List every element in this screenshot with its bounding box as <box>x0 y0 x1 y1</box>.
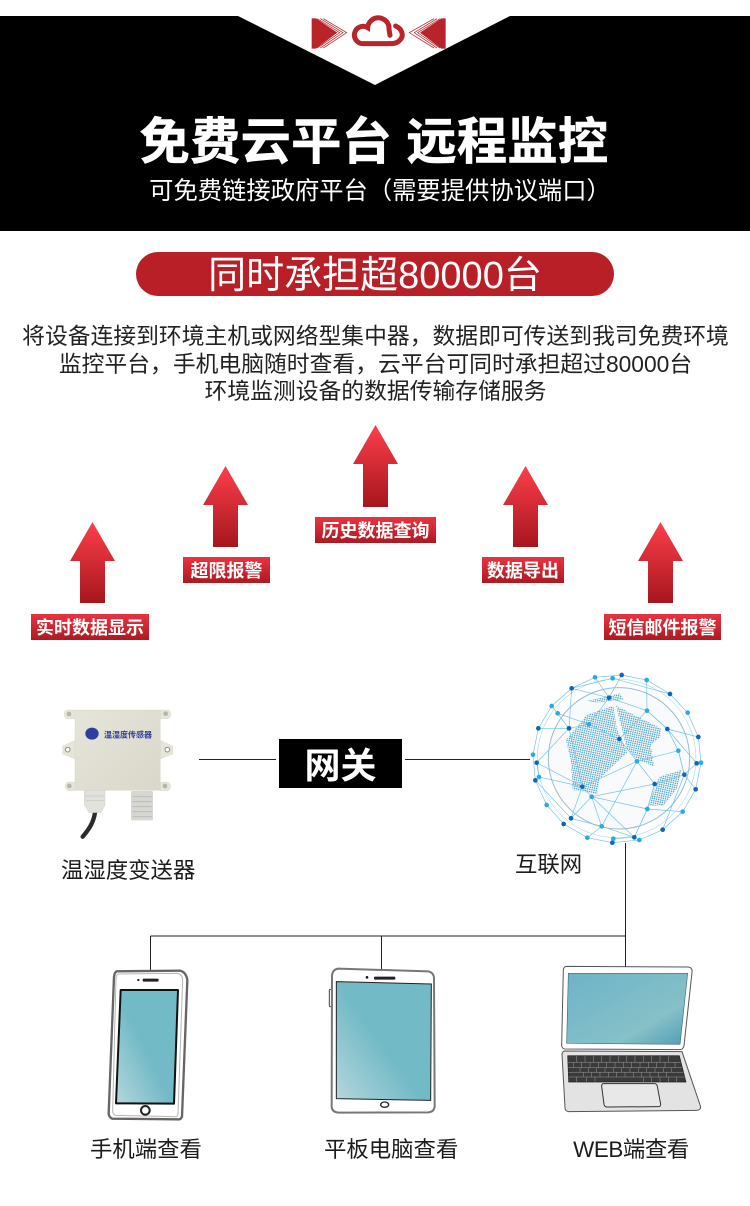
label: data export <box>482 557 564 583</box>
arrow: data export <box>503 466 548 547</box>
arrow: realtime data <box>70 522 115 603</box>
label: sms email alarm: 短信邮件报警 <box>608 618 716 638</box>
connector: internet to devices <box>150 843 626 970</box>
gateway box <box>279 739 402 788</box>
gateway box: 网关 <box>304 745 376 786</box>
label: data export: 数据导出 <box>487 561 559 581</box>
heading pill: 同时承担超80000台 <box>208 255 542 297</box>
label: sensor: 温湿度变送器 <box>61 858 195 883</box>
title: 免费云平台 远程监控 <box>140 114 608 170</box>
arrow: sms email alarm <box>638 522 683 603</box>
label: over-limit alarm <box>183 557 270 583</box>
label: history query: 历史数据查询 <box>322 521 430 541</box>
label: over-limit alarm: 超限报警 <box>190 561 262 581</box>
arrow: history query <box>353 425 398 507</box>
icon: red cloud with chevrons <box>312 15 446 49</box>
icon: tablet <box>328 968 436 1114</box>
header background with notch <box>0 16 750 231</box>
icon: phone <box>108 970 188 1121</box>
arrow: over-limit alarm <box>203 466 248 547</box>
icon: internet globe <box>530 672 704 845</box>
panel: black header <box>0 15 750 231</box>
label: tablet: 平板电脑查看 <box>324 1137 458 1162</box>
connector: sensor to gateway <box>199 759 276 760</box>
label: realtime data: 实时数据显示 <box>36 618 144 638</box>
intro paragraph: 环境监测设备的数据传输存储服务 <box>205 378 546 404</box>
label: laptop: WEB端查看 <box>573 1137 689 1162</box>
intro paragraph <box>22 323 729 404</box>
icon: temperature humidity sensor <box>62 710 173 839</box>
label: history query <box>315 517 436 543</box>
icon: temperature humidity sensor: 温湿度传感器 <box>104 729 152 739</box>
label: internet: 互联网 <box>515 852 582 877</box>
icon: laptop <box>561 966 702 1112</box>
subtitle: 可免费链接政府平台（需要提供协议端口） <box>149 178 611 205</box>
intro paragraph: 监控平台，手机电脑随时查看，云平台可同时承担超过80000台 <box>59 351 692 377</box>
label: phone: 手机端查看 <box>90 1137 202 1162</box>
heading pill <box>136 252 614 296</box>
intro paragraph: 将设备连接到环境主机或网络型集中器，数据即可传送到我司免费环境 <box>22 323 729 349</box>
connector: gateway to internet <box>405 759 530 760</box>
